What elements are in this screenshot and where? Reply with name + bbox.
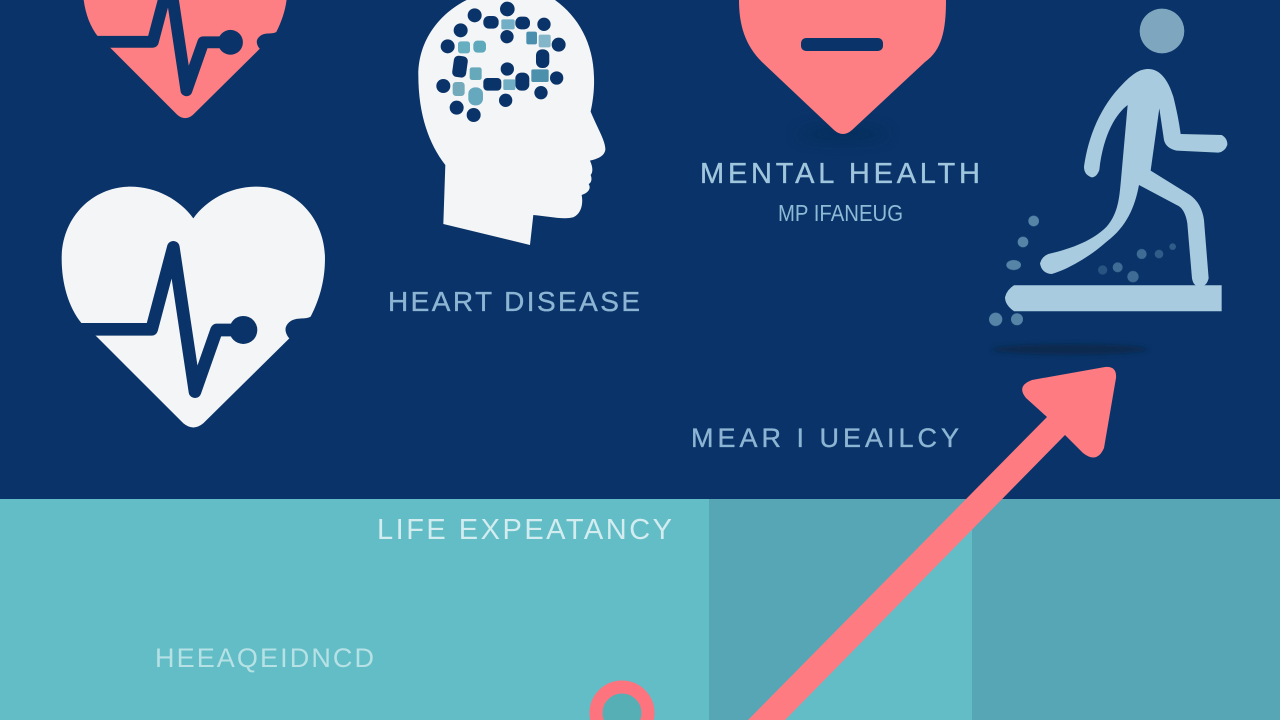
label: garbled lower caption: HEEAQEIDNCD [155, 643, 374, 673]
icon: head with brain network [418, 0, 605, 245]
icon: white heart with pulse [62, 187, 325, 427]
icon: coral heart with pulse [83, 0, 287, 118]
icon: coral ring marker [596, 687, 648, 720]
icon: coral heart with minus [739, 0, 946, 141]
icon: runner on treadmill [989, 9, 1227, 355]
label: life expectancy: LIFE EXPEATANCY [377, 514, 672, 546]
label: garbled sub-caption: MP IFANEUG [778, 200, 903, 226]
label: garbled quality caption: MEAR I UEAILCY [691, 423, 959, 453]
panel: navy upper background [0, 0, 1280, 499]
label: mental health: MENTAL HEALTH [700, 158, 980, 190]
arrow: rising coral trend [748, 367, 1116, 720]
panel: teal lower band [0, 499, 1280, 720]
label: heart disease: HEART DISEASE [388, 286, 640, 317]
